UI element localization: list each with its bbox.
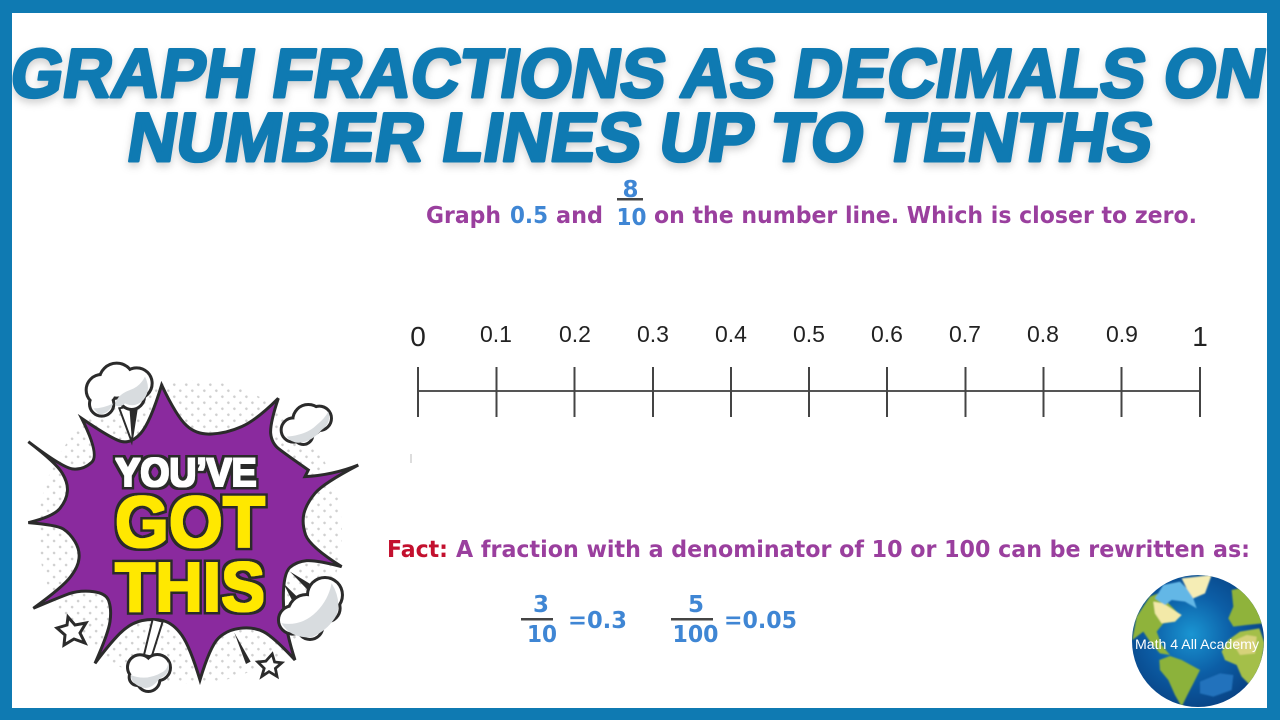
tick labels: 0.9 bbox=[1106, 321, 1138, 347]
stray mark bbox=[410, 454, 412, 463]
cloud right bbox=[280, 572, 341, 638]
example: 3/10 = 0.3: 3 bbox=[533, 592, 549, 618]
fraction: 8/10: 8 bbox=[622, 177, 639, 203]
cloud bottom bbox=[129, 619, 169, 690]
sticker: you've got this bbox=[28, 362, 359, 693]
burst bbox=[28, 385, 358, 680]
cloud top-right bbox=[283, 406, 330, 443]
europe bbox=[1228, 588, 1263, 627]
africa bbox=[1222, 628, 1265, 685]
tick labels: 0.8 bbox=[1027, 321, 1059, 347]
question text: and bbox=[556, 203, 603, 229]
question text: Graph bbox=[426, 203, 501, 229]
question text bbox=[426, 177, 1197, 231]
tick labels bbox=[410, 321, 1208, 352]
title: GRAPH FRACTIONS AS DECIMALS ON bbox=[6, 34, 1272, 112]
example: 3/10 = 0.3 bbox=[521, 592, 627, 648]
logo text: Math 4 All Academy bbox=[1135, 636, 1259, 652]
axis bbox=[418, 390, 1200, 392]
south america bbox=[1159, 656, 1200, 707]
sticker lettering: GOT bbox=[115, 483, 265, 563]
fact text: A fraction with a denominator of 10 or 100 can be rewritten as: bbox=[456, 537, 1250, 563]
tick labels: 0.6 bbox=[871, 321, 903, 347]
tick labels: 0.5 bbox=[793, 321, 825, 347]
tick labels: 0.4 bbox=[715, 321, 747, 347]
question text: 0.5 bbox=[510, 203, 548, 229]
title: NUMBER LINES UP TO TENTHS bbox=[123, 98, 1159, 175]
question text: on the number line. Which is closer to zero. bbox=[654, 203, 1197, 229]
greenland bbox=[1182, 575, 1212, 598]
halftone dots bbox=[38, 380, 342, 684]
tick labels: 0.7 bbox=[949, 321, 981, 347]
cloud top-left bbox=[88, 365, 151, 442]
tick labels: 0.3 bbox=[637, 321, 669, 347]
title bbox=[6, 34, 1272, 175]
fraction: 8/10: 10 bbox=[616, 205, 646, 231]
tick labels: 0.1 bbox=[480, 321, 512, 347]
sticker lettering: THIS bbox=[115, 548, 265, 626]
sticker lettering bbox=[115, 451, 265, 626]
example: 5/100 = 0.05: =0.05 bbox=[724, 608, 797, 634]
example: 5/100 = 0.05: 5 bbox=[688, 592, 704, 618]
hudson light blue bbox=[1155, 582, 1197, 608]
sahara pale bbox=[1232, 635, 1257, 655]
globe logo bbox=[1132, 575, 1264, 707]
example: 5/100 = 0.05: 100 bbox=[672, 622, 718, 648]
sticker lettering: YOU’VE bbox=[116, 451, 256, 495]
ocean bbox=[1132, 575, 1264, 707]
example: 3/10 = 0.3: =0.3 bbox=[568, 608, 627, 634]
fact text: Fact: bbox=[387, 537, 448, 563]
ocean shallows bbox=[1200, 673, 1233, 697]
motion line bbox=[234, 633, 251, 664]
canada pale bbox=[1153, 602, 1182, 623]
tick labels: 0 bbox=[410, 321, 426, 352]
fraction: 8/10 bbox=[616, 177, 646, 231]
example: 5/100 = 0.05 bbox=[671, 592, 797, 648]
tick labels: 0.2 bbox=[559, 321, 591, 347]
ticks bbox=[418, 367, 1200, 417]
example: 3/10 = 0.3: 10 bbox=[527, 622, 557, 648]
star left bbox=[57, 617, 86, 645]
number line bbox=[410, 321, 1208, 417]
star right bbox=[258, 654, 282, 676]
tick labels: 1 bbox=[1192, 321, 1208, 352]
north america bbox=[1132, 593, 1180, 655]
